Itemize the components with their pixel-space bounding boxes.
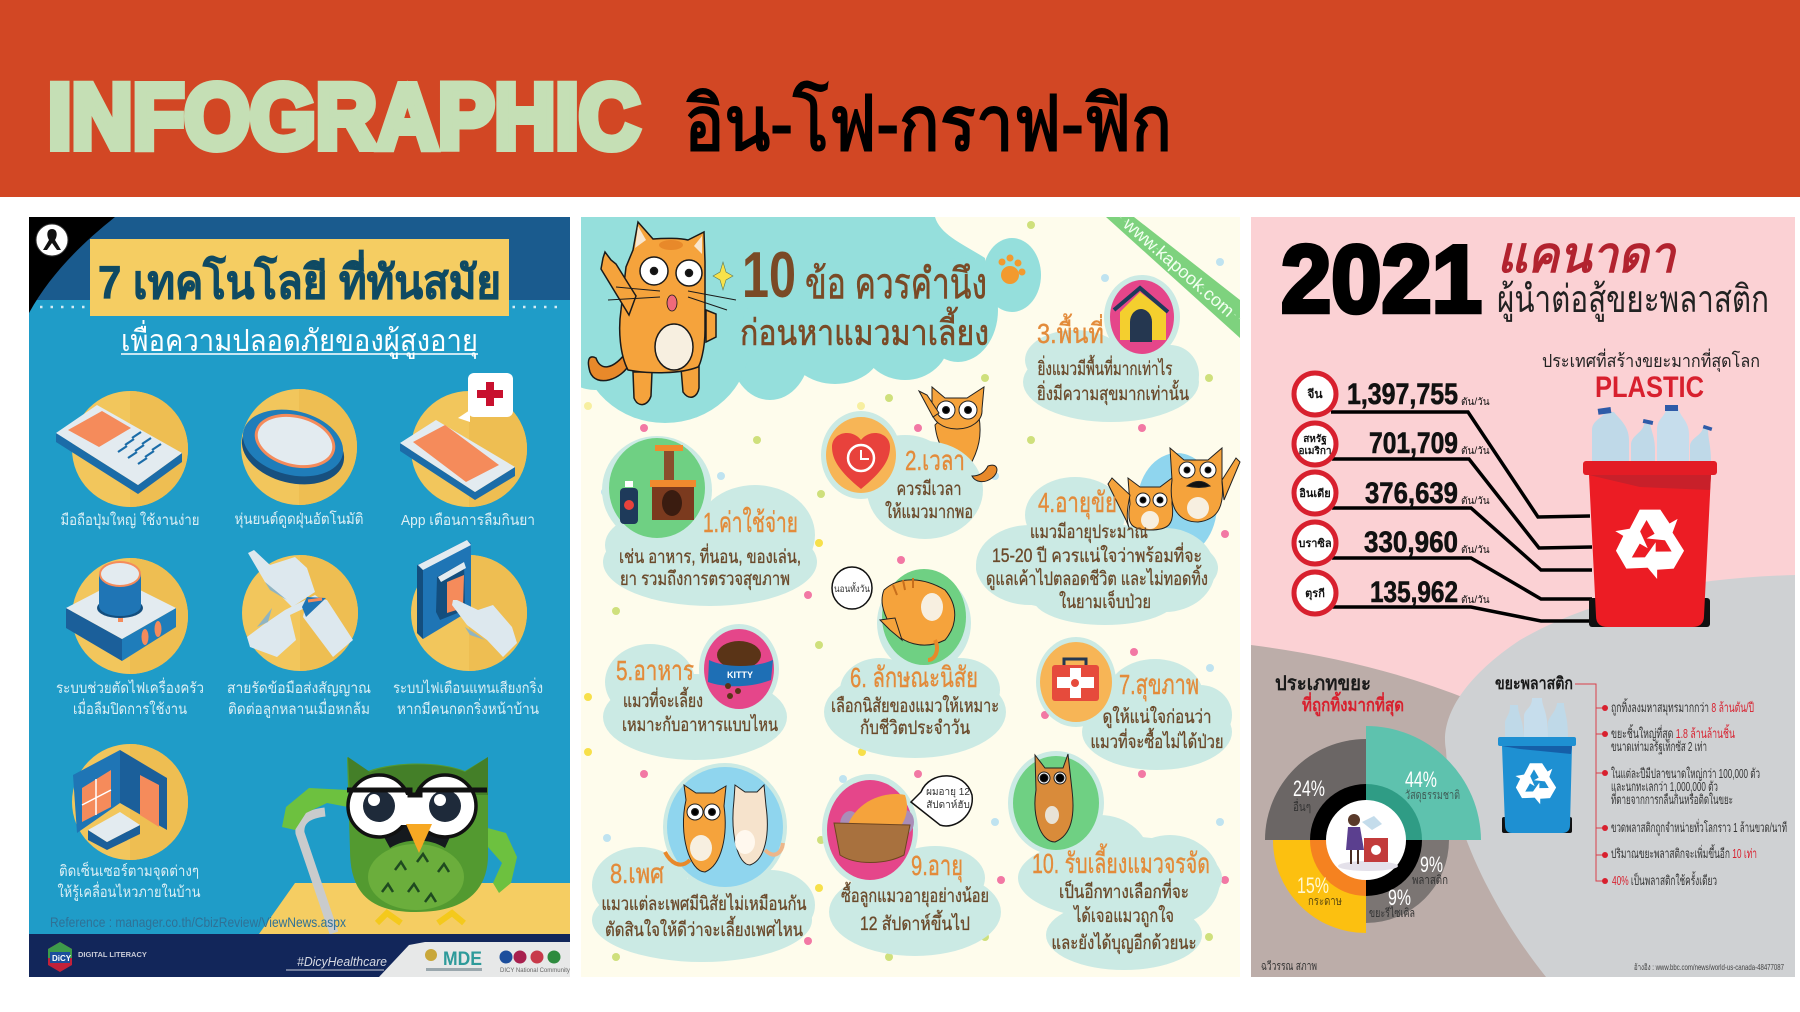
icon: light doorbell (411, 540, 527, 671)
item 2: time: 2.เวลา (905, 445, 965, 476)
item 8: gender: แมวแต่ละเพศมีนิสัยไม่เหมือนกัน (602, 893, 807, 915)
USA: อเมริกา (1298, 445, 1332, 457)
heading: types of waste: ที่ถูกทิ้งมากที่สุด (1302, 691, 1404, 717)
Turkey: ตัน/วัน (1461, 595, 1490, 606)
headline: 2021 (1281, 226, 1482, 333)
small waving cat (919, 387, 984, 467)
China: 1,397,755 (1347, 378, 1458, 411)
India: อินเดีย (1299, 487, 1331, 500)
two cats: male and female (665, 785, 783, 872)
footer logo (48, 942, 147, 972)
speech bubble: 12 weeks: สัปดาห์ฮับ (926, 799, 970, 811)
fact lines (1611, 698, 1787, 888)
icon: sensor room (72, 744, 188, 860)
ribbon: www.kapook.com: www.kapook.com (1119, 213, 1238, 321)
icon: medicine reminder phone (400, 373, 527, 507)
item 9: age: 9.อายุ (911, 850, 963, 883)
item 2: time: ให้แมวมากพอ (885, 501, 973, 523)
headline (1281, 226, 1769, 333)
icon: kitten in basket (827, 780, 914, 880)
item 8: gender: ตัดสินใจให้ดีว่าจะเลี้ยงเพศไหน (605, 916, 803, 941)
data labels: 24% (1293, 776, 1325, 801)
China (1294, 373, 1490, 415)
China: จีน (1307, 387, 1323, 401)
icon captions (56, 510, 543, 901)
fact lines: ขนาดเท่ามลรัฐเท็กซัส 2 เท่า (1611, 737, 1707, 755)
fact lines: 40% เป็นพลาสติกใช้ครั้งเดียว (1612, 871, 1717, 888)
item 4: lifespan: แมวมีอายุประมาณ (1030, 521, 1148, 544)
USA (1294, 423, 1490, 465)
data labels: 44% (1405, 767, 1437, 792)
icon: wrist band (242, 550, 358, 671)
icon: paw (998, 254, 1026, 284)
recycle symbol (1607, 510, 1692, 584)
icon: kitchen stove cut-off (66, 558, 188, 674)
heading box (90, 239, 509, 316)
Brazil: บราซิล (1298, 537, 1332, 550)
country ranking (1294, 373, 1490, 614)
item 3: space: 3.พื้นที่ (1037, 313, 1104, 349)
tabby cat (1035, 754, 1073, 842)
item 9: age (822, 774, 1001, 956)
heading: types of waste (1275, 673, 1404, 717)
item 4: lifespan: 4.อายุขัย (1038, 487, 1117, 520)
item 9: age: ซื้อลูกแมวอายุอย่างน้อย (841, 882, 989, 908)
item 4: lifespan: 15-20 ปี ควรแน่ใจว่าพร้อมที่จะ (992, 542, 1202, 567)
item 1: cost: เช่น อาหาร, ที่นอน, ของเล่น, (619, 543, 801, 568)
India: 376,639 (1365, 477, 1458, 510)
item 10: adopt stray cat (1008, 751, 1222, 970)
chart heading (1542, 348, 1760, 404)
confetti dots (584, 221, 1229, 961)
item 6: temperament: เลือกนิสัยของแมวให้เหมาะ (831, 695, 999, 717)
fact lines: และนกทะเลกว่า 1,000,000 ตัว (1611, 779, 1718, 794)
item 7: health (1036, 637, 1232, 770)
headline: แคนาดา (1497, 227, 1677, 283)
footer logo: DIGITAL LITERACY (78, 950, 147, 959)
China: ตัน/วัน (1461, 397, 1490, 408)
icon captions: ระบบไฟเตือนแทนเสียงกริ่ง (393, 677, 543, 697)
India: ตัน/วัน (1461, 496, 1490, 507)
subtitle: เพื่อความปลอดภัยของผู้สูงอายุ (121, 320, 478, 360)
item 4: lifespan: ในยามเจ็บป่วย (1059, 589, 1151, 613)
fact lines: ปริมาณขยะพลาสติกจะเพิ่มขึ้นอีก 10 เท่า (1611, 844, 1757, 861)
title: INFOGRAPHIC: INFOGRAPHIC (48, 66, 640, 168)
icon captions: ติดเซ็นเซอร์ตามจุดต่างๆ (59, 861, 199, 881)
chart heading: ประเทศที่สร้างขยะมากที่สุดโลก (1542, 348, 1760, 372)
icon captions: ระบบช่วยตัดไฟเครื่องครัว (56, 677, 204, 697)
Brazil: 330,960 (1364, 526, 1458, 559)
Turkey (1294, 572, 1490, 614)
icon: first aid kit (1040, 642, 1112, 722)
icon: heart clock (826, 417, 896, 493)
item 10: adopt stray cat: 10. รับเลี้ยงแมวจรจัด (1032, 843, 1210, 879)
recycle symbol (1511, 763, 1561, 807)
title text: ข้อ ควรคำนึง (805, 260, 987, 307)
icon captions: เมื่อลืมปิดการใช้งาน (73, 698, 187, 718)
data labels: กระดาษ (1308, 894, 1342, 908)
item 7: health: แมวที่จะซื้อไม่ได้ป่วย (1090, 728, 1224, 753)
item 10: adopt stray cat: เป็นอีกทางเลือกที่จะ (1059, 878, 1189, 903)
item 9: age: 12 สัปดาห์ขึ้นไป (860, 910, 970, 935)
item 5: food (603, 624, 787, 760)
data labels: 9% (1388, 885, 1411, 910)
icon captions: หากมีคนกดกริ่งหน้าบ้าน (397, 698, 539, 718)
connector lines to bin (1331, 412, 1592, 621)
title cloud (550, 217, 1041, 423)
plastic waste facts: ขยะพลาสติก (1495, 674, 1573, 693)
icon: big-button phone (56, 391, 188, 507)
USA: 701,709 (1369, 427, 1458, 460)
data labels: ขยะรีไซเคิล (1369, 906, 1415, 920)
icon captions: App เตือนการลืมกินยา (401, 512, 535, 529)
item 4: lifespan (976, 448, 1240, 625)
social icons: DICY National Community (500, 968, 570, 974)
icon: cat food bowl: KITTY (727, 670, 753, 680)
item 8: gender (592, 763, 815, 962)
hashtag: #DicyHealthcare (297, 954, 387, 969)
chart heading: PLASTIC (1595, 371, 1704, 404)
icon: red recycling bin with bottles (1583, 405, 1717, 627)
icon: person recycling bottles (1338, 814, 1398, 871)
icon captions: ติดต่อลูกหลานเมื่อหกล้ม (228, 698, 370, 718)
item 10: adopt stray cat: ได้เจอแมวถูกใจ (1072, 905, 1174, 927)
fact lines: ถูกทิ้งลงมหาสมุทรมากกว่า 8 ล้านตัน/ปี (1611, 698, 1754, 716)
item 6: temperament: กับชีวิตประจำวัน (860, 717, 970, 739)
data labels: 15% (1297, 873, 1329, 898)
Brazil: ตัน/วัน (1461, 545, 1490, 556)
item 6: temperament (824, 567, 1006, 758)
speech bubble: 12 weeks: ผมอายุ 12 (926, 787, 970, 798)
item 2: time: ควรมีเวลา (896, 478, 962, 500)
author credit: ฉวีวรรณ สภาพ (1261, 959, 1317, 973)
icon: cat food bowl (704, 629, 774, 709)
social icons (500, 950, 570, 974)
main cat mascot (588, 222, 736, 405)
icon captions: สายรัดข้อมือส่งสัญญาณ (227, 680, 371, 697)
black corner with ribbon badge (29, 217, 115, 313)
data labels (1293, 767, 1460, 920)
footer logo: DiCY (52, 954, 72, 963)
title text (740, 238, 989, 353)
item 1: cost: ยา รวมถึงการตรวจสุขภาพ (620, 569, 790, 591)
item 1: cost: 1.ค่าใช้จ่าย (703, 506, 798, 538)
lying cat (880, 578, 955, 660)
icon: sparkle (713, 262, 733, 290)
Turkey: 135,962 (1370, 576, 1458, 609)
icon: cat house (1110, 280, 1174, 354)
Turkey: ตุรกี (1305, 587, 1325, 601)
fact lines: ขยะชิ้นใหญ่ที่สุด 1.8 ล้านล้านชิ้น (1611, 724, 1735, 742)
item 7: health: 7.สุขภาพ (1119, 669, 1199, 702)
item 3: space: ยิ่งแมวมีพื้นที่มากเท่าไร (1038, 355, 1172, 380)
icon: cat tower (609, 438, 705, 538)
icon captions: หุ่นยนต์ดูดฝุ่นอัตโนมัติ (234, 510, 364, 529)
Brazil (1294, 522, 1490, 564)
MDE logo: MDE (443, 949, 482, 970)
item 3: space: ยิ่งมีความสุขมากเท่านั้น (1037, 380, 1189, 406)
heading box: 7 เทคโนโลยี ที่ทันสมัย (98, 250, 501, 308)
reference line: Reference : manager.co.th/CbizReview/ViewNews.aspx (50, 914, 346, 930)
yarn circle (1137, 453, 1217, 557)
item 5: food: 5.อาหาร (616, 655, 694, 686)
India (1294, 472, 1490, 514)
title text: 10 (742, 238, 796, 311)
icon: blue recycling bin (1498, 698, 1576, 833)
panel: 10 things to consider before adopting a cat (550, 213, 1240, 977)
panel: 7 technologies for elderly safety (29, 217, 570, 977)
speech bubble: 12 weeks (911, 776, 972, 826)
icon captions: มือถือปุ่มใหญ่ ใช้งานง่าย (60, 511, 200, 530)
item 8: gender: 8.เพศ (610, 858, 664, 889)
item 3: space (1023, 275, 1199, 422)
plastic waste facts (1495, 674, 1787, 888)
title: Thai pronunciation: อิน-โฟ-กราฟ-ฟิก (684, 81, 1172, 167)
speech bubble: sleeps all day: นอนทั้งวัน (834, 582, 870, 595)
two cats (1108, 448, 1240, 530)
speech bubble: sleeps all day (832, 567, 872, 609)
heading: types of waste: ประเภทขยะ (1275, 673, 1371, 695)
header banner (0, 0, 1800, 197)
item 10: adopt stray cat: และยังได้บุญอีกด้วยนะ (1052, 932, 1196, 955)
data labels: วัสดุธรรมชาติ (1405, 788, 1460, 803)
USA: สหรัฐ (1303, 433, 1327, 445)
data labels: อื่นๆ (1293, 798, 1311, 814)
icon captions: ให้รู้เคลื่อนไหวภายในบ้าน (58, 881, 200, 901)
data labels: พลาสติก (1412, 873, 1448, 887)
rose chart of waste types (1265, 726, 1481, 933)
item 5: food: เหมาะกับอาหารแบบไหน (622, 714, 778, 736)
item 2: time (821, 387, 997, 539)
item 6: temperament: 6. ลักษณะนิสัย (850, 662, 978, 693)
footer bar (29, 934, 570, 977)
data labels: 9% (1420, 852, 1443, 877)
owl mascot with cane (282, 757, 517, 933)
item 4: lifespan: ดูแลเค้าไปตลอดชีวิต และไม่ทอดทิ้ง (986, 565, 1208, 590)
USA: ตัน/วัน (1461, 446, 1490, 457)
item 1: cost (602, 436, 817, 606)
title text: ก่อนหาแมวมาเลี้ยง (740, 306, 989, 353)
panel: Canada 2021 plastic waste (1251, 217, 1795, 977)
item 5: food: แมวที่จะเลี้ยง (623, 687, 703, 712)
item 7: health: ดูให้แน่ใจก่อนว่า (1102, 706, 1212, 728)
MDE logo (425, 949, 482, 971)
icon: robot vacuum (235, 389, 357, 505)
